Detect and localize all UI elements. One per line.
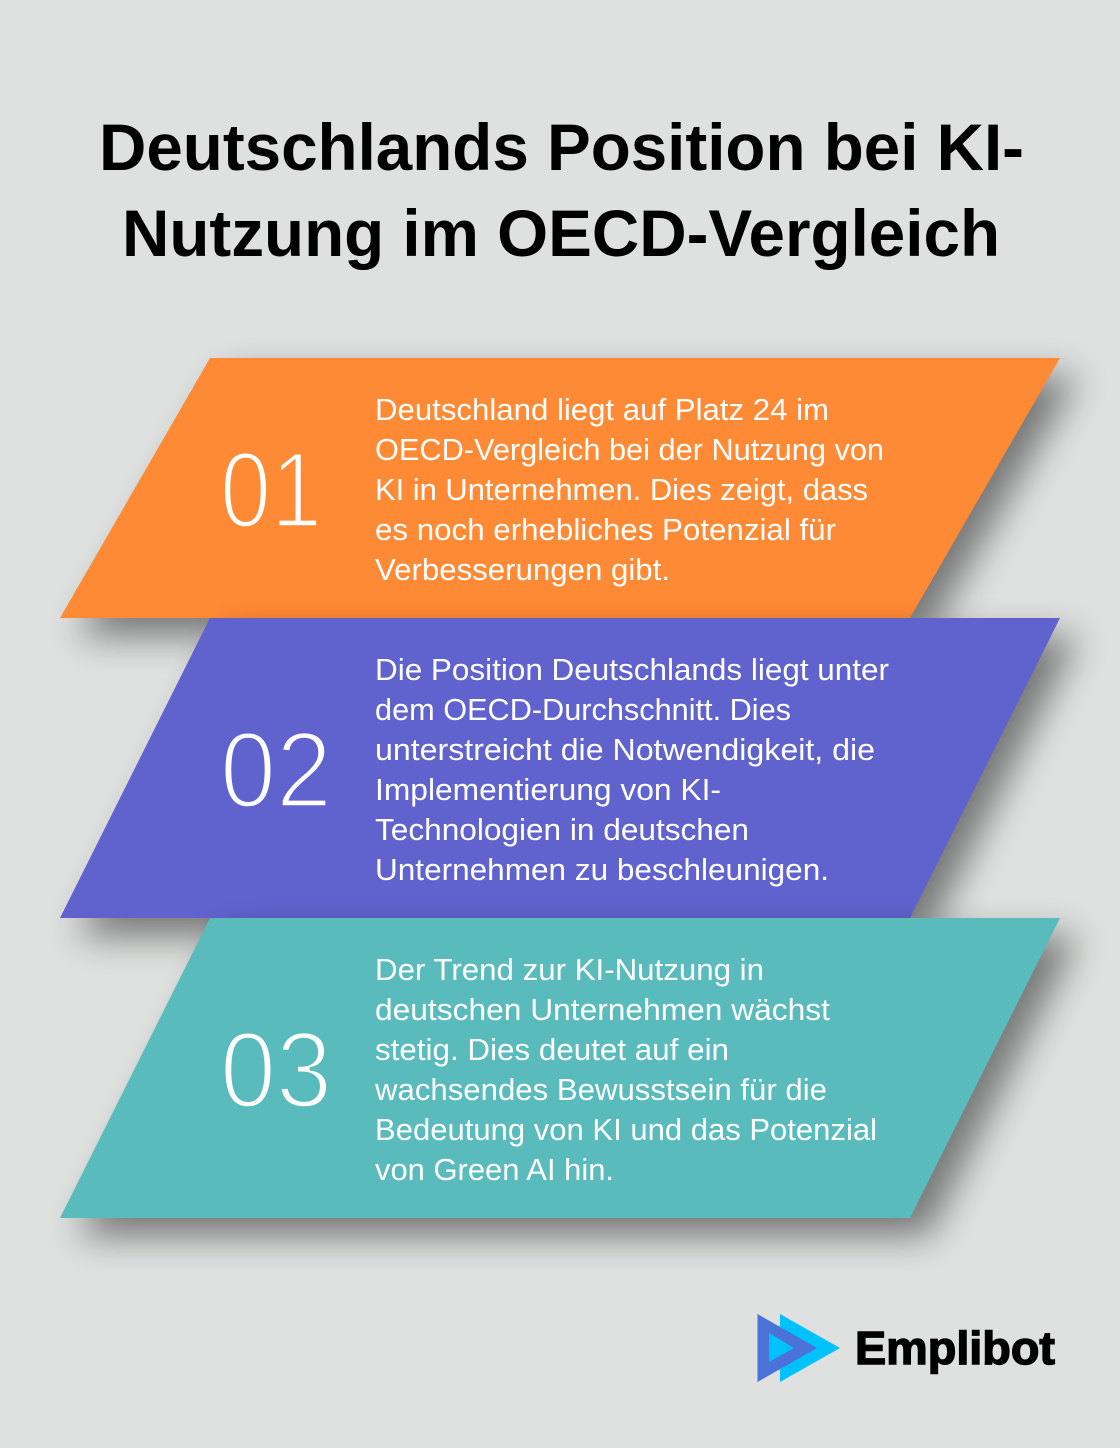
text block 03: deutschen Unternehmen wächst xyxy=(375,992,830,1027)
text block 02: Implementierung von KI- xyxy=(375,772,721,807)
panel: 03 teal xyxy=(60,918,1078,1236)
panel: 01 orange xyxy=(60,358,1078,636)
text block 01: KI in Unternehmen. Dies zeigt, dass xyxy=(375,472,868,507)
text block 01: es noch erhebliches Potenzial für xyxy=(375,512,836,547)
text block 02: unterstreicht die Notwendigkeit, die xyxy=(375,732,875,767)
text block 03: stetig. Dies deutet auf ein xyxy=(375,1032,729,1067)
text block 03: Der Trend zur KI-Nutzung in xyxy=(375,952,764,987)
text block 01: OECD-Vergleich bei der Nutzung von xyxy=(375,432,884,467)
text block 02: dem OECD-Durchschnitt. Dies xyxy=(375,692,791,727)
text block 01 xyxy=(375,392,884,587)
text block 02: Unternehmen zu beschleunigen. xyxy=(375,852,829,887)
title: Deutschlands Position bei KI- xyxy=(99,110,1024,184)
logo: Emplibot xyxy=(758,1314,1055,1382)
text block 03: von Green AI hin. xyxy=(375,1152,614,1187)
text block 03 xyxy=(374,952,877,1187)
text block 02: Die Position Deutschlands liegt unter xyxy=(375,652,889,687)
text block 03: Bedeutung von KI und das Potenzial xyxy=(375,1112,877,1147)
text block 01: Deutschland liegt auf Platz 24 im xyxy=(375,392,829,427)
text block 02 xyxy=(375,652,889,887)
icon: play triangles xyxy=(758,1314,840,1382)
title: Nutzung im OECD-Vergleich xyxy=(122,196,1000,270)
panel: 02 purple xyxy=(60,618,1078,936)
title xyxy=(99,110,1024,270)
number 03: 03 xyxy=(220,1009,332,1130)
text block 03: wachsendes Bewusstsein für die xyxy=(374,1072,827,1107)
text block 01: Verbesserungen gibt. xyxy=(375,552,670,587)
number 02: 02 xyxy=(220,709,332,830)
text block 02: Technologien in deutschen xyxy=(375,812,749,847)
number 01: 01 xyxy=(220,429,322,550)
logo wordmark: Emplibot xyxy=(855,1322,1055,1374)
